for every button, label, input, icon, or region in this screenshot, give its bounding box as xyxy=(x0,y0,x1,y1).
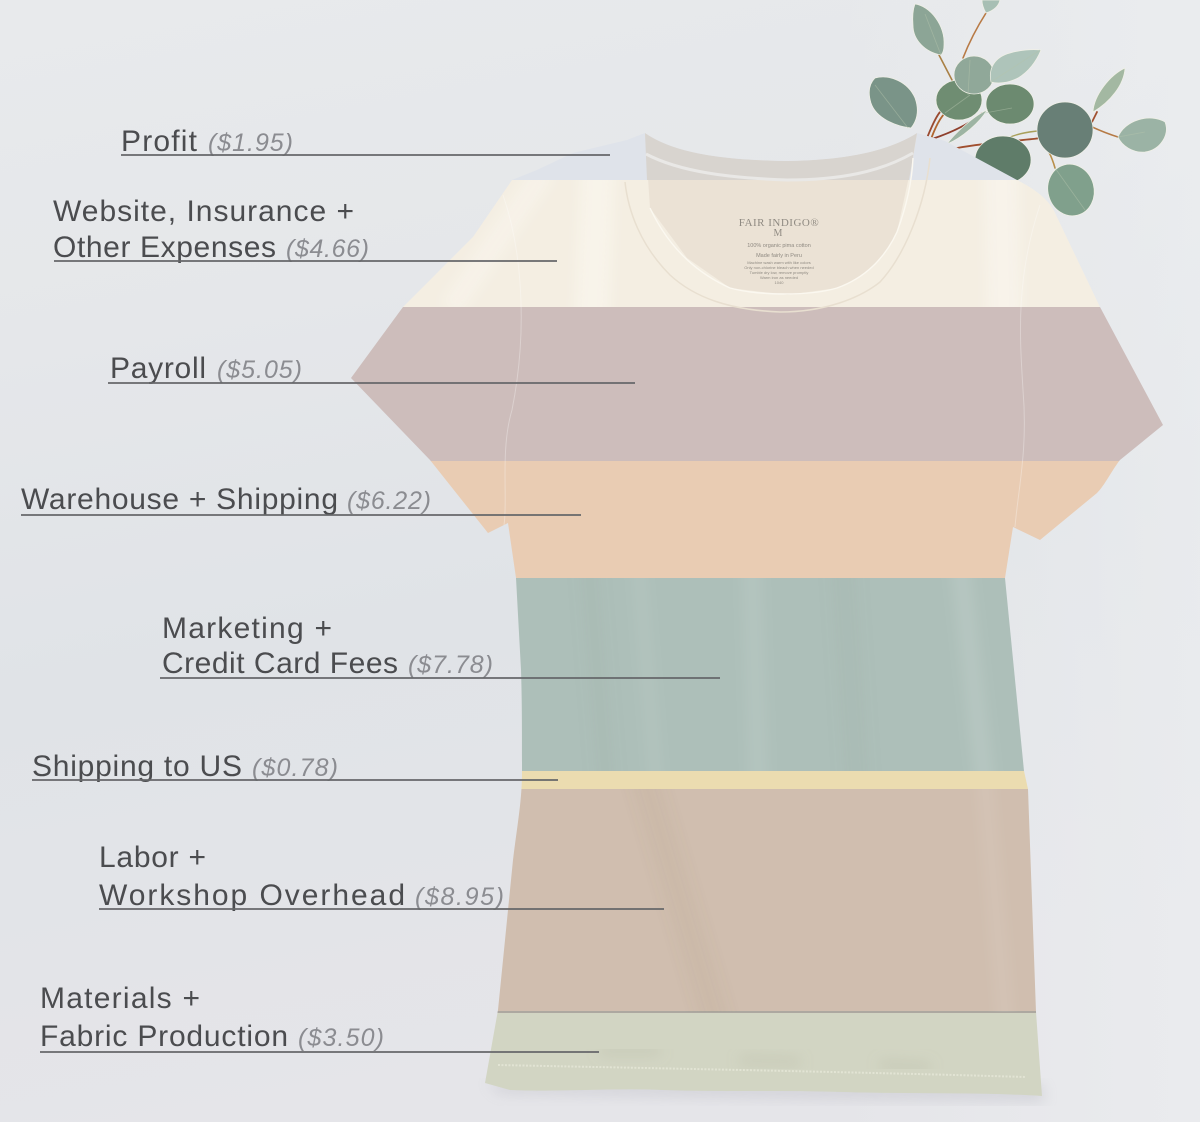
label: profit: Profit xyxy=(121,125,198,158)
clothing tag: Machine wash warm with like colors xyxy=(747,260,811,265)
band: shipping to US xyxy=(522,771,1028,789)
label: shipping to US xyxy=(32,750,558,783)
label: payroll xyxy=(108,352,635,385)
clothing tag: 100% organic pima cotton xyxy=(747,243,811,249)
clothing tag: FAIR INDIGO® xyxy=(739,217,819,229)
band: website, insurance and other expenses xyxy=(404,180,1100,307)
label: materials and fabric production: Fabric Production xyxy=(40,1020,288,1053)
clothing tag: M xyxy=(774,228,783,239)
label: website, insurance and other expenses: Other Expenses xyxy=(53,231,276,264)
clothing tag: Only non-chlorine bleach when needed xyxy=(744,265,814,270)
label: profit: ($1.95) xyxy=(208,129,293,157)
icon: leaves xyxy=(869,0,1166,221)
hem stitching xyxy=(498,1065,1025,1077)
collar stitching xyxy=(646,153,913,180)
clothing tag: 1040 xyxy=(775,280,784,285)
label: payroll: Payroll xyxy=(110,352,206,385)
label: marketing and credit card fees: ($7.78) xyxy=(408,651,493,679)
label: website, insurance and other expenses: Website, Insurance + xyxy=(53,195,354,228)
label: shipping to US: Shipping to US xyxy=(32,750,242,783)
label: warehouse and shipping: Warehouse + Shipping xyxy=(21,483,338,516)
shirt base xyxy=(926,136,1018,180)
label: payroll: ($5.05) xyxy=(217,356,302,384)
label: materials and fabric production: Materials + xyxy=(40,982,200,1015)
label: materials and fabric production xyxy=(40,982,599,1053)
label: labor and workshop overhead xyxy=(99,841,664,912)
clothing tag: Made fairly in Peru xyxy=(756,253,802,259)
band: payroll xyxy=(340,307,1180,461)
label: warehouse and shipping: ($6.22) xyxy=(347,487,431,515)
neck interior xyxy=(648,149,914,295)
clothing tag: Warm iron as needed xyxy=(760,275,798,280)
label: materials and fabric production: ($3.50) xyxy=(298,1024,384,1052)
sleeve seams xyxy=(503,195,521,525)
clothing tag: Tumble dry low, remove promptly xyxy=(750,270,808,275)
t-shirt xyxy=(340,120,1180,1112)
label: labor and workshop overhead: Labor + xyxy=(99,841,206,874)
icon: eucalyptus branch xyxy=(869,0,1166,221)
shirt shadow xyxy=(487,1082,1045,1102)
band: materials and fabric production xyxy=(485,1013,1042,1096)
band: warehouse and shipping xyxy=(431,461,1119,578)
label: profit xyxy=(121,125,610,158)
label: labor and workshop overhead: Workshop Overhead xyxy=(99,879,405,912)
label: marketing and credit card fees: Credit Card Fees xyxy=(162,647,398,680)
clothing tag xyxy=(739,217,819,285)
band: labor and workshop overhead xyxy=(498,789,1036,1012)
label: marketing and credit card fees xyxy=(160,612,720,680)
band: marketing and credit card fees xyxy=(516,578,1024,771)
label: website, insurance and other expenses: ($4.66) xyxy=(286,235,369,263)
label: warehouse and shipping xyxy=(21,483,581,516)
label: labor and workshop overhead: ($8.95) xyxy=(415,883,504,911)
label: marketing and credit card fees: Marketing + xyxy=(162,612,332,645)
label: shipping to US: ($0.78) xyxy=(252,754,338,782)
label: website, insurance and other expenses xyxy=(53,195,557,264)
